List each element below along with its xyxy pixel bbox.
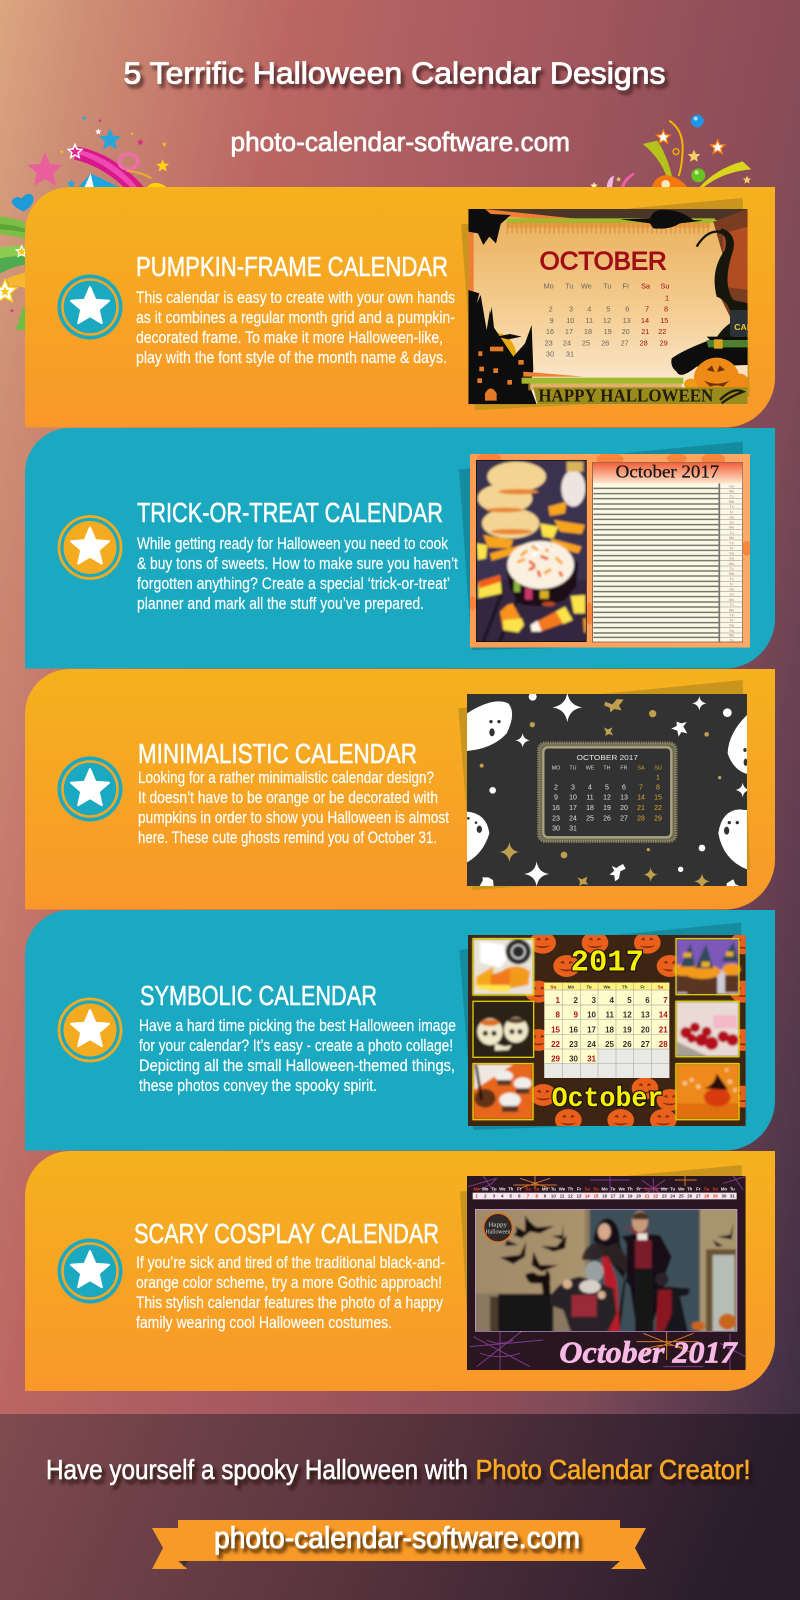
calendar thumbnail 1: 15 xyxy=(660,316,668,325)
calendar thumbnail 5: 19 xyxy=(628,1194,633,1199)
calendar thumbnail 2: We xyxy=(729,536,734,540)
body text 3: here. These cute ghosts remind you of October 31. xyxy=(138,828,437,847)
panel: scary cosplay calendar xyxy=(25,1151,775,1391)
body text 5: orange color scheme, try a more Gothic approach! xyxy=(136,1273,442,1292)
footer band xyxy=(0,1414,800,1600)
calendar thumbnail 5: Happy xyxy=(488,1222,508,1229)
calendar thumbnail 3: 5 xyxy=(605,785,609,792)
calendar thumbnail 1: 18 xyxy=(584,327,592,336)
calendar thumbnail 3: 4 xyxy=(588,785,592,792)
calendar thumbnail 1: 1 xyxy=(665,294,669,303)
heading 3: MINIMALISTIC CALENDAR xyxy=(138,738,417,769)
calendar thumbnail 4: 14 xyxy=(659,1011,668,1020)
calendar thumbnail 4: 7 xyxy=(663,996,668,1005)
calendar thumbnail 3: 28 xyxy=(637,815,645,822)
calendar thumbnail 4: 1 xyxy=(556,996,561,1005)
calendar thumbnail 4 xyxy=(459,923,757,1131)
calendar thumbnail 5 xyxy=(460,1165,747,1370)
calendar thumbnail 1: 8 xyxy=(664,305,668,314)
ribbon banner xyxy=(152,1520,646,1569)
calendar thumbnail 5: Tu xyxy=(610,1187,616,1192)
body text 5: This stylish calendar features the photo of a happy xyxy=(136,1293,443,1312)
calendar thumbnail 1: 11 xyxy=(586,316,593,325)
ribbon body xyxy=(178,1520,620,1561)
calendar thumbnail 5: Sa xyxy=(525,1187,531,1192)
calendar thumbnail 2: Su xyxy=(729,484,734,488)
calendar thumbnail 5: Mo xyxy=(482,1187,489,1192)
calendar thumbnail 5: We xyxy=(678,1187,685,1192)
body text 2: While getting ready for Halloween you need to cook xyxy=(137,534,448,553)
title: 5 Terrific Halloween Calendar Designs xyxy=(124,56,666,90)
calendar thumbnail 1: 23 xyxy=(545,338,553,347)
calendar thumbnail 4: 24 xyxy=(587,1040,597,1049)
calendar thumbnail 2: Mo xyxy=(729,490,734,494)
calendar thumbnail 4: Fr xyxy=(640,984,645,989)
calendar thumbnail 4: Mo xyxy=(568,984,574,989)
calendar thumbnail 4: 28 xyxy=(659,1040,668,1049)
calendar thumbnail 5: Su xyxy=(534,1187,540,1192)
calendar thumbnail 1: 13 xyxy=(623,316,631,325)
calendar thumbnail 5: Fr xyxy=(577,1187,581,1192)
panel 4 background xyxy=(25,910,775,1150)
body text 2: forgotten anything? Create a special ‘trick-or-treat’ xyxy=(137,574,450,593)
calendar thumbnail 2: Fr xyxy=(730,582,734,586)
calendar thumbnail 5: 30 xyxy=(722,1194,727,1199)
calendar thumbnail 3: 19 xyxy=(603,805,611,812)
calendar thumbnail 3: OCTOBER 2017 xyxy=(577,753,638,762)
calendar thumbnail 1: 10 xyxy=(566,316,574,325)
calendar thumbnail 5: We xyxy=(499,1187,506,1192)
calendar thumbnail 1: 29 xyxy=(660,338,668,347)
calendar thumbnail 3: 10 xyxy=(569,795,577,802)
calendar thumbnail 1: We xyxy=(581,281,592,290)
calendar thumbnail 2: Sa xyxy=(729,515,735,519)
body text 4: Have a hard time picking the best Halloween image xyxy=(139,1016,456,1035)
calendar thumbnail 3: 1 xyxy=(656,775,660,782)
calendar thumbnail 1: 4 xyxy=(587,305,591,314)
calendar thumbnail 4: 23 xyxy=(569,1040,579,1049)
calendar thumbnail 4: Tu xyxy=(586,984,592,989)
body text 4: these photos convey the spooky spirit. xyxy=(139,1076,377,1095)
calendar thumbnail 5: 7 xyxy=(527,1194,530,1199)
heading 2: TRICK-OR-TREAT CALENDAR xyxy=(137,497,443,528)
heading 4: SYMBOLIC CALENDAR xyxy=(140,980,377,1011)
calendar thumbnail 5: 23 xyxy=(662,1194,667,1199)
body text 3: pumpkins in order to show you Halloween is almost xyxy=(138,808,449,827)
heading 1: PUMPKIN-FRAME CALENDAR xyxy=(136,251,448,282)
calendar thumbnail 2: Tu xyxy=(730,495,734,499)
calendar thumbnail 2: Fr xyxy=(730,510,734,514)
calendar thumbnail 2: Tu xyxy=(730,567,734,571)
calendar thumbnail 5: Su xyxy=(653,1187,659,1192)
calendar thumbnail 1: 28 xyxy=(640,338,648,347)
calendar thumbnail 5: Sa xyxy=(644,1187,650,1192)
body text 1: decorated frame. To make it more Halloween-like, xyxy=(136,328,443,347)
calendar thumbnail 3: 21 xyxy=(637,805,645,812)
icon: star badge 2 xyxy=(58,515,122,580)
calendar thumbnail 4: 22 xyxy=(551,1040,561,1049)
calendar thumbnail 3: 9 xyxy=(554,795,558,802)
panel 3 background xyxy=(25,669,775,910)
calendar thumbnail 1: 7 xyxy=(645,305,649,314)
calendar thumbnail 5: Halloween xyxy=(486,1228,511,1235)
calendar thumbnail 3: 24 xyxy=(569,815,577,822)
calendar thumbnail 2: Su xyxy=(729,521,734,525)
calendar thumbnail 2: Fr xyxy=(730,546,734,550)
calendar thumbnail 5: Tu xyxy=(551,1187,556,1192)
calendar thumbnail 4: We xyxy=(604,984,611,989)
calendar thumbnail 3: FR xyxy=(620,765,628,771)
calendar thumbnail 1: 30 xyxy=(546,349,554,358)
calendar thumbnail 1: 22 xyxy=(658,327,666,336)
calendar thumbnail 4: 12 xyxy=(623,1011,632,1020)
calendar thumbnail 3: 16 xyxy=(552,805,560,812)
body text 3: It doesn’t have to be orange or be decorated with xyxy=(138,788,438,807)
calendar thumbnail 4: 15 xyxy=(551,1025,561,1034)
calendar thumbnail 4: 11 xyxy=(606,1011,615,1020)
calendar thumbnail 5: 13 xyxy=(577,1194,582,1199)
calendar thumbnail 3: 26 xyxy=(603,815,611,822)
calendar thumbnail 5: 14 xyxy=(585,1194,590,1199)
calendar thumbnail 3: MO xyxy=(552,765,560,771)
body text 4: for your calendar? It’s easy - create a photo collage! xyxy=(139,1036,453,1055)
calendar thumbnail 2: Mo xyxy=(729,634,734,638)
calendar thumbnail 1: CAN xyxy=(734,322,753,332)
calendar thumbnail 2: We xyxy=(729,608,734,612)
panel 2 background xyxy=(25,428,775,669)
calendar thumbnail 5: Fr xyxy=(696,1187,701,1192)
calendar thumbnail 2: Su xyxy=(729,557,734,561)
body text 2: & buy tons of sweets. How to make sure you haven’t xyxy=(137,554,458,573)
calendar thumbnail 5: 16 xyxy=(602,1194,608,1199)
calendar thumbnail 2: We xyxy=(729,500,734,504)
calendar thumbnail 3: TH xyxy=(603,765,611,771)
calendar thumbnail 1: 25 xyxy=(582,338,590,347)
calendar thumbnail 5: 22 xyxy=(653,1194,659,1199)
calendar thumbnail 2: Su xyxy=(729,593,734,597)
calendar thumbnail 5: Th xyxy=(687,1187,693,1192)
calendar thumbnail 3: 17 xyxy=(569,805,577,812)
calendar thumbnail 3: 7 xyxy=(639,785,643,792)
calendar thumbnail 5: 2 xyxy=(484,1194,487,1199)
calendar thumbnail 2: Th xyxy=(729,577,734,581)
calendar thumbnail 4: 6 xyxy=(645,996,650,1005)
calendar thumbnail 5: 5 xyxy=(509,1194,512,1199)
calendar thumbnail 4: 17 xyxy=(587,1025,597,1034)
calendar thumbnail 3 xyxy=(458,680,750,890)
calendar thumbnail 3: 31 xyxy=(569,825,577,832)
calendar thumbnail 5: 1 xyxy=(475,1194,478,1199)
calendar thumbnail 2: Tu xyxy=(730,531,734,535)
calendar thumbnail 2 xyxy=(459,442,751,650)
calendar thumbnail 3: 18 xyxy=(586,805,594,812)
calendar thumbnail 1: 16 xyxy=(546,327,554,336)
calendar thumbnail 5: Tu xyxy=(492,1187,497,1192)
calendar thumbnail 5: Mo xyxy=(661,1187,668,1192)
decoration: left burst xyxy=(0,116,169,330)
body text 4: Depicting all the small Halloween-themed things, xyxy=(139,1056,455,1075)
icon: star badge 4 xyxy=(58,998,122,1062)
heading 5: SCARY COSPLAY CALENDAR xyxy=(134,1218,439,1249)
calendar thumbnail 5: 27 xyxy=(696,1194,701,1199)
panel: trick-or-treat calendar xyxy=(25,428,775,669)
calendar thumbnail 5: 12 xyxy=(568,1194,573,1199)
calendar thumbnail 3: 2 xyxy=(554,785,558,792)
body text 4 xyxy=(139,1016,456,1095)
calendar thumbnail 1: 9 xyxy=(550,316,554,325)
calendar thumbnail 5: Fr xyxy=(636,1187,641,1192)
panel 1 background xyxy=(25,187,775,428)
calendar thumbnail 3: 27 xyxy=(620,815,628,822)
calendar thumbnail 5: 17 xyxy=(611,1194,616,1199)
calendar thumbnail 5: 4 xyxy=(501,1194,504,1199)
calendar thumbnail 2: Mo xyxy=(729,562,734,566)
calendar thumbnail 3: 8 xyxy=(656,785,660,792)
calendar thumbnail 5: Sa xyxy=(704,1187,710,1192)
calendar thumbnail 4: 18 xyxy=(605,1025,615,1034)
calendar thumbnail 5: 3 xyxy=(493,1194,496,1199)
calendar thumbnail 3: 30 xyxy=(552,825,560,832)
calendar thumbnail 4: 4 xyxy=(610,996,615,1005)
panel: pumpkin-frame calendar xyxy=(25,187,775,428)
calendar thumbnail 2: Th xyxy=(729,541,734,545)
calendar thumbnail 4: 29 xyxy=(551,1055,561,1064)
calendar thumbnail 1: 5 xyxy=(606,305,610,314)
calendar thumbnail 2: October 2017 xyxy=(616,461,719,481)
calendar thumbnail 4: 20 xyxy=(641,1025,650,1034)
calendar thumbnail 5: 24 xyxy=(670,1194,676,1199)
calendar thumbnail 5: 29 xyxy=(713,1194,718,1199)
calendar thumbnail 5: Th xyxy=(508,1187,514,1192)
calendar thumbnail 2: Tu xyxy=(730,638,734,642)
calendar thumbnail 5: 20 xyxy=(636,1194,642,1199)
calendar thumbnail 1: 17 xyxy=(565,327,573,336)
calendar thumbnail 5: We xyxy=(618,1187,625,1192)
icon: star badge 3 xyxy=(58,756,122,822)
calendar thumbnail 4: 16 xyxy=(569,1025,579,1034)
calendar thumbnail 5: 21 xyxy=(645,1194,650,1199)
calendar thumbnail 1: Tu xyxy=(565,281,573,290)
calendar thumbnail 2: Tu xyxy=(730,603,734,607)
calendar thumbnail 4: 13 xyxy=(641,1011,650,1020)
calendar thumbnail 5: Tu xyxy=(730,1187,735,1192)
calendar thumbnail 3: 22 xyxy=(654,805,662,812)
calendar thumbnail 5: 15 xyxy=(594,1194,599,1199)
calendar thumbnail 5: Mo xyxy=(474,1187,480,1192)
calendar thumbnail 5: 6 xyxy=(518,1194,521,1199)
calendar thumbnail 4: 30 xyxy=(569,1055,579,1064)
footer slogan: Photo Calendar Creator! xyxy=(476,1454,750,1485)
calendar thumbnail 3: 20 xyxy=(620,805,628,812)
calendar thumbnail 5: Su xyxy=(593,1187,599,1192)
footer slogan: Have yourself a spooky Halloween with xyxy=(46,1454,468,1485)
icon: star badge 5 xyxy=(58,1238,122,1304)
website url: photo-calendar-software.com xyxy=(230,127,570,157)
calendar thumbnail 5: 10 xyxy=(551,1194,556,1199)
calendar thumbnail 5: Mo xyxy=(721,1187,727,1192)
calendar thumbnail 5: Mo xyxy=(602,1187,608,1192)
calendar thumbnail 1: 31 xyxy=(566,349,574,358)
calendar thumbnail 5: 8 xyxy=(535,1194,538,1199)
calendar thumbnail 1: HAPPY HALLOWEEN xyxy=(538,385,713,405)
calendar thumbnail 5: 31 xyxy=(730,1194,735,1199)
calendar thumbnail 4: 2 xyxy=(574,996,579,1005)
calendar thumbnail 4: Su xyxy=(550,984,556,989)
calendar thumbnail 1: 2 xyxy=(549,305,553,314)
calendar thumbnail 2: Mo xyxy=(729,526,734,530)
calendar thumbnail 3: 12 xyxy=(603,795,611,802)
calendar thumbnail 4: 10 xyxy=(587,1011,597,1020)
calendar thumbnail 3: 25 xyxy=(586,815,594,822)
panel: minimalistic calendar xyxy=(25,669,775,910)
calendar thumbnail 5: October 2017 xyxy=(559,1336,738,1370)
panel: symbolic calendar xyxy=(25,910,775,1150)
calendar thumbnail 3: TU xyxy=(569,765,577,771)
calendar thumbnail 2: Su xyxy=(729,629,734,633)
body text 1 xyxy=(136,288,455,367)
body text 2: planner and mark all the stuff you’ve prepared. xyxy=(137,594,424,613)
calendar thumbnail 5: Mo xyxy=(542,1187,548,1192)
calendar thumbnail 4: 21 xyxy=(659,1025,668,1034)
calendar thumbnail 1: 3 xyxy=(569,305,573,314)
calendar thumbnail 5: Sa xyxy=(585,1187,591,1192)
ribbon left tail xyxy=(152,1528,188,1569)
calendar thumbnail 4: 5 xyxy=(627,996,632,1005)
calendar thumbnail 4: 3 xyxy=(592,996,597,1005)
calendar thumbnail 2: Sa xyxy=(729,588,735,592)
calendar thumbnail 5: 11 xyxy=(560,1194,565,1199)
calendar thumbnail 3: 11 xyxy=(586,795,594,802)
calendar thumbnail 4: 27 xyxy=(641,1040,650,1049)
body text 1: play with the font style of the month name & days. xyxy=(136,348,447,367)
calendar thumbnail 2: Sa xyxy=(729,552,735,556)
calendar thumbnail 1: 27 xyxy=(621,338,629,347)
body text 5: If you’re sick and tired of the traditional black-and- xyxy=(136,1253,445,1272)
body text 5: family wearing cool Halloween costumes. xyxy=(136,1313,392,1332)
calendar thumbnail 4: 25 xyxy=(605,1040,615,1049)
calendar thumbnail 5: Fr xyxy=(517,1187,522,1192)
calendar thumbnail 3: 13 xyxy=(620,795,628,802)
body text 2 xyxy=(137,534,458,613)
panel 5 background xyxy=(25,1151,775,1391)
calendar thumbnail 1: Fr xyxy=(623,281,630,290)
calendar thumbnail 5: We xyxy=(559,1187,566,1192)
calendar thumbnail 3: SA xyxy=(637,765,645,771)
calendar thumbnail 4: October xyxy=(552,1084,663,1115)
calendar thumbnail 1: Sa xyxy=(641,281,651,290)
calendar thumbnail 1: TRE xyxy=(734,335,752,345)
calendar thumbnail 3: 15 xyxy=(654,795,662,802)
calendar thumbnail 3: SU xyxy=(654,765,662,771)
calendar thumbnail 4: 2017 xyxy=(571,946,644,981)
calendar thumbnail 4: Th xyxy=(622,984,628,989)
calendar thumbnail 3: 14 xyxy=(637,795,645,802)
body text 1: as it combines a regular month grid and a pumpkin- xyxy=(136,308,455,327)
calendar thumbnail 1: 26 xyxy=(601,338,609,347)
calendar thumbnail 5: Th xyxy=(568,1187,573,1192)
calendar thumbnail 1: Tu xyxy=(603,281,611,290)
calendar thumbnail 3: 6 xyxy=(622,785,626,792)
calendar thumbnail 3: 3 xyxy=(571,785,575,792)
calendar thumbnail 4: 31 xyxy=(587,1055,597,1064)
decoration: right burst xyxy=(590,115,751,189)
calendar thumbnail 3: 23 xyxy=(552,815,560,822)
calendar thumbnail 1: 6 xyxy=(625,305,629,314)
calendar thumbnail 1: 12 xyxy=(603,316,611,325)
calendar thumbnail 5: 26 xyxy=(687,1194,693,1199)
body text 3 xyxy=(138,768,449,847)
body text 3: Looking for a rather minimalistic calendar design? xyxy=(138,768,434,787)
ribbon right tail xyxy=(611,1528,646,1569)
calendar thumbnail 2: Th xyxy=(729,613,734,617)
calendar thumbnail 1: Su xyxy=(660,281,669,290)
calendar thumbnail 2: We xyxy=(729,572,734,576)
calendar thumbnail 1: 24 xyxy=(563,338,571,347)
calendar thumbnail 5: 9 xyxy=(544,1194,547,1199)
calendar thumbnail 1: 20 xyxy=(622,327,630,336)
body text 5 xyxy=(136,1253,445,1332)
calendar thumbnail 1 xyxy=(461,198,753,410)
calendar thumbnail 4: 8 xyxy=(556,1011,561,1020)
calendar thumbnail 1: OCTOBER xyxy=(540,248,667,275)
calendar thumbnail 5: Tu xyxy=(670,1187,675,1192)
footer slogan xyxy=(46,1454,750,1485)
calendar thumbnail 3: 29 xyxy=(654,815,662,822)
body text 1: This calendar is easy to create with your own hands xyxy=(136,288,455,307)
calendar thumbnail 3: WE xyxy=(586,765,595,771)
calendar thumbnail 5: 25 xyxy=(679,1194,684,1199)
calendar thumbnail 4: 19 xyxy=(623,1025,632,1034)
calendar thumbnail 5: Su xyxy=(713,1187,718,1192)
calendar thumbnail 5: 28 xyxy=(704,1194,710,1199)
calendar thumbnail 1: 14 xyxy=(641,316,649,325)
ribbon url: photo-calendar-software.com xyxy=(214,1520,580,1555)
calendar thumbnail 2: Sa xyxy=(729,624,735,628)
calendar thumbnail 1: 21 xyxy=(641,327,649,336)
calendar thumbnail 4: 26 xyxy=(623,1040,632,1049)
calendar thumbnail 5: Th xyxy=(627,1187,633,1192)
calendar thumbnail 4: Sa xyxy=(657,984,664,989)
calendar thumbnail 2: Th xyxy=(729,505,734,509)
calendar thumbnail 5: 18 xyxy=(619,1194,625,1199)
calendar thumbnail 4: 9 xyxy=(574,1011,579,1020)
calendar thumbnail 1: 19 xyxy=(604,327,612,336)
icon: star badge 1 xyxy=(58,274,122,340)
calendar thumbnail 1: Mo xyxy=(544,281,554,290)
calendar thumbnail 2: Mo xyxy=(729,598,734,602)
calendar thumbnail 2: Fr xyxy=(730,619,734,623)
